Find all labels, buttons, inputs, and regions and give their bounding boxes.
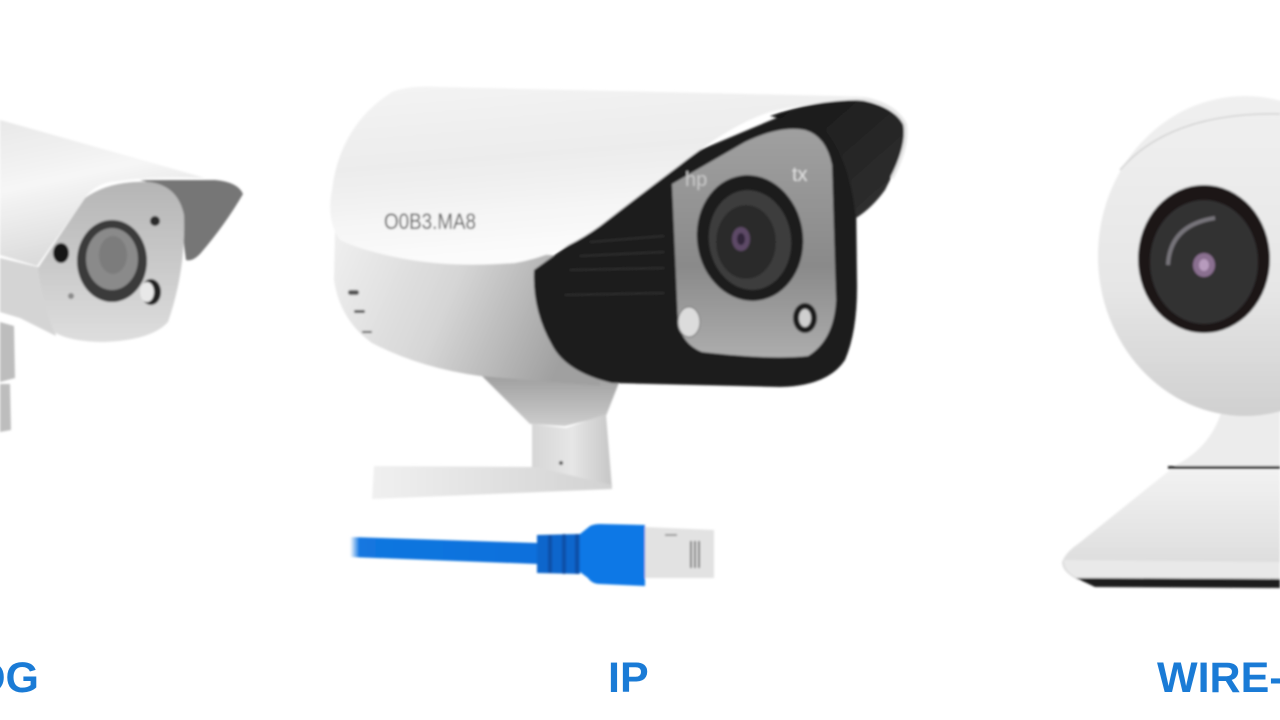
cable boot	[580, 524, 645, 586]
right camera: wire-free dome camera	[1062, 96, 1280, 588]
center camera mount post	[532, 414, 612, 488]
center camera hood	[330, 87, 870, 265]
left camera visor underside	[140, 180, 243, 260]
center camera grey face	[672, 129, 836, 357]
cable strain relief	[537, 534, 580, 574]
right camera lens	[1138, 185, 1270, 333]
center camera brand text: O0B3.MA8	[384, 209, 476, 234]
label: IP: IP	[608, 654, 649, 702]
left camera: analog bullet camera	[0, 120, 243, 432]
left camera hood	[0, 120, 205, 266]
center camera visor rim	[800, 98, 906, 178]
center camera body	[334, 232, 600, 386]
center camera black shroud	[534, 108, 857, 387]
center camera shroud ribs	[565, 236, 664, 295]
right camera sphere	[1098, 96, 1280, 416]
left camera lens	[77, 220, 147, 302]
label: wire-free (cropped): WIRE-	[1157, 654, 1280, 702]
center camera vents	[348, 290, 372, 333]
center camera lens	[689, 168, 811, 308]
right camera neck	[1170, 410, 1280, 468]
cable cord	[350, 537, 537, 564]
center camera mount foot	[372, 466, 612, 499]
cable RJ45 plug	[645, 527, 714, 578]
center camera mount hinge	[478, 372, 620, 426]
left camera face	[38, 182, 184, 342]
ethernet cable	[350, 524, 714, 586]
center camera LEDs	[678, 303, 817, 337]
center camera: IP bullet camera: tx	[792, 164, 808, 186]
left camera mount	[0, 322, 15, 432]
left camera body	[0, 258, 56, 336]
center camera face marks: hp	[685, 169, 707, 191]
left camera sensors	[53, 216, 161, 305]
center camera: IP bullet camera	[330, 87, 906, 499]
right camera base shadow line	[1076, 578, 1280, 588]
center camera visor underside	[770, 100, 905, 218]
right camera base	[1062, 470, 1280, 580]
